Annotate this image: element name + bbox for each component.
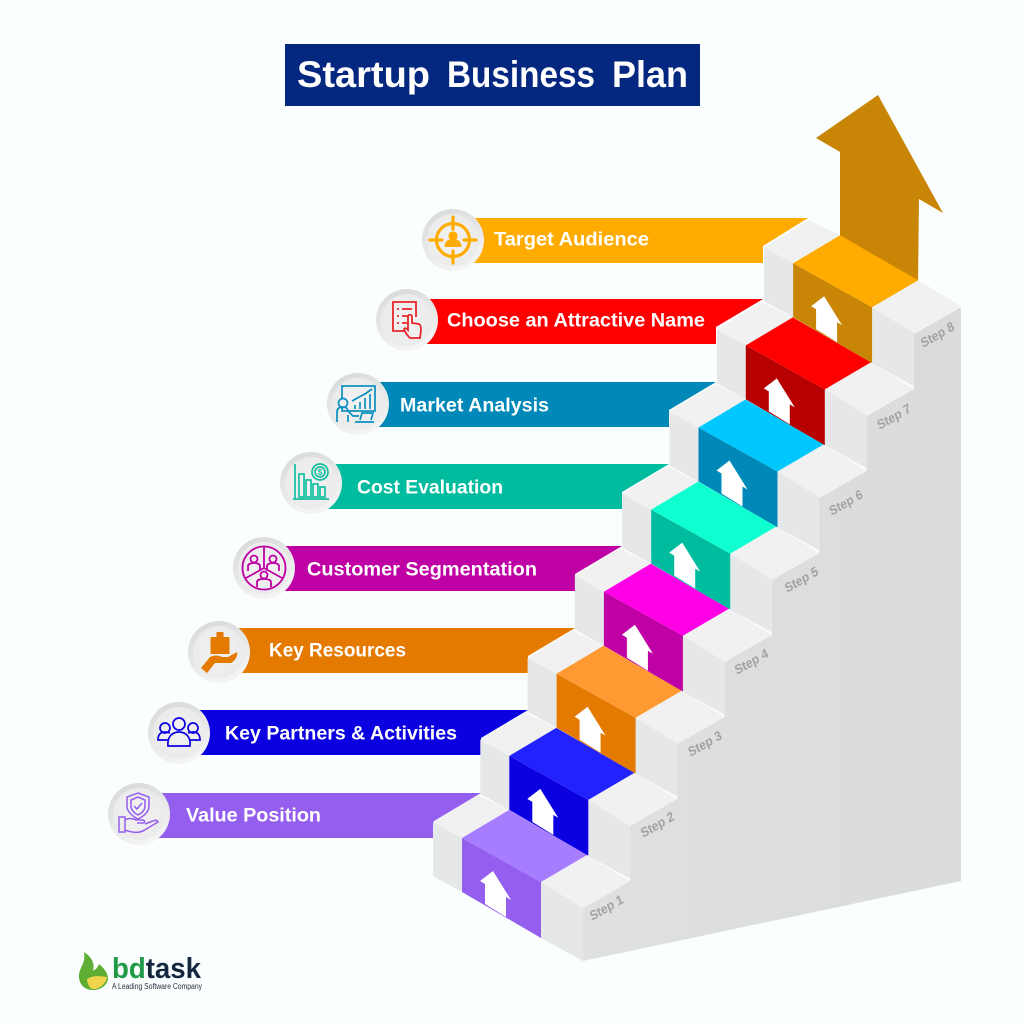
step labels: Step 5 — [782, 563, 820, 596]
banner: Key Resources — [188, 621, 575, 683]
staircase steps — [433, 220, 961, 961]
step labels: Step 6 — [827, 486, 865, 519]
staircase side wall — [583, 307, 961, 961]
banner: Choose an Attractive Name — [376, 289, 763, 351]
label: Cost Evaluation: Cost Evaluation — [357, 478, 503, 498]
step labels: Step 8 — [918, 318, 956, 351]
icon: flame — [79, 952, 108, 990]
icon: target audience — [422, 209, 484, 271]
label: Target Audience: Target Audience — [494, 230, 649, 250]
banner: Value Position — [108, 783, 481, 845]
logo: bdtask — [79, 952, 202, 991]
step 6 — [670, 384, 866, 550]
icon: market analysis — [327, 373, 389, 435]
step 3 — [528, 631, 725, 797]
step labels: Step 3 — [686, 727, 724, 760]
label: Choose an Attractive Name: Choose an Attractive Name — [447, 310, 705, 332]
logo tagline: A Leading Software Company — [112, 982, 202, 991]
icon: key resources — [188, 621, 250, 683]
step 4 — [575, 549, 772, 715]
step labels: Step 4 — [732, 645, 771, 678]
step 1 — [433, 795, 630, 961]
step labels: Step 2 — [638, 808, 676, 841]
banner: Customer Segmentation — [233, 537, 622, 599]
icon: customer segmentation — [233, 537, 295, 599]
step 7 — [717, 302, 914, 468]
label: Market Analysis: Market Analysis — [400, 396, 549, 416]
title: Business — [447, 54, 595, 95]
logo wordmark: bdtask — [112, 953, 202, 985]
banner: Key Partners & Activities — [148, 702, 528, 764]
step 8 — [764, 220, 961, 386]
banner: Cost Evaluation — [280, 452, 669, 514]
icon: checklist with hand — [376, 289, 438, 351]
step labels: Step 7 — [875, 400, 913, 433]
banner: Target Audience — [422, 209, 808, 271]
label: Customer Segmentation: Customer Segmentation — [307, 560, 537, 580]
title: Startup — [297, 54, 430, 95]
step labels — [587, 318, 956, 924]
step labels: Step 1 — [587, 891, 625, 924]
icon: key partners — [148, 702, 210, 764]
label: Key Resources: Key Resources — [269, 640, 406, 662]
step 2 — [480, 713, 677, 879]
label: Value Position: Value Position — [186, 806, 321, 826]
label: Key Partners & Activities: Key Partners & Activities — [225, 724, 457, 744]
icon: cost evaluation — [280, 452, 342, 514]
icon: value position — [108, 783, 170, 845]
step 5 — [622, 467, 819, 633]
title — [285, 44, 700, 106]
big arrow rising from step 8 — [816, 95, 943, 284]
icon: cost evaluation: $ — [318, 468, 323, 477]
banner: Market Analysis — [327, 373, 716, 435]
title: Plan — [612, 54, 688, 95]
